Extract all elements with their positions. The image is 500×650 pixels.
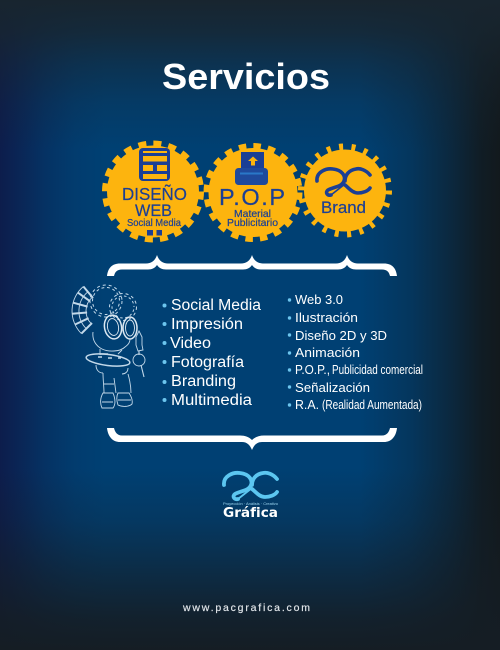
mascot hair <box>72 285 136 334</box>
label: Diseño Web: Social Media <box>127 217 181 229</box>
label: P.O.P <box>219 184 285 229</box>
logo: PAC Gráfica <box>223 473 278 521</box>
service list right: Publicidad comercial <box>332 363 423 377</box>
logo wordmark: Gráfica <box>223 505 278 521</box>
service list right <box>288 293 423 412</box>
bullets right <box>288 298 291 407</box>
label: Diseño Web: DISEÑO <box>122 183 187 204</box>
title: Servicios <box>162 56 330 97</box>
service list left: Social Media <box>171 297 261 314</box>
icon: printer <box>235 152 268 185</box>
label: Brand: Brand <box>321 198 366 217</box>
service list left: Multimedia <box>171 392 252 409</box>
top bracket <box>107 255 397 276</box>
bullets left <box>162 304 166 402</box>
service list right: Ilustración <box>295 311 358 325</box>
service list left: Fotografía <box>171 354 244 371</box>
mascot goggles <box>103 314 137 340</box>
label: P.O.P: P.O.P <box>219 184 285 210</box>
label: P.O.P: Publicitario <box>227 217 278 229</box>
gear: Diseño Web <box>105 144 201 240</box>
service list right: Diseño 2D y 3D <box>295 329 387 343</box>
mascot body, palette and brush <box>85 331 145 408</box>
service list right: R.A. <box>295 398 319 412</box>
service list left: Video <box>170 335 211 352</box>
service list right: Web 3.0 <box>295 293 343 307</box>
website url: www.pacgrafica.com <box>182 602 310 614</box>
icon: social squares <box>147 230 162 236</box>
service list right: P.O.P., <box>295 363 330 377</box>
logo tagline: Proyección · Análisis · Creativo <box>223 502 278 506</box>
logo mark <box>224 473 277 499</box>
gear: PAC Brand <box>302 147 388 234</box>
label: Diseño Web: WEB <box>135 202 172 220</box>
icon: pac logo <box>317 169 370 195</box>
label: Diseño Web <box>122 183 187 229</box>
service list left: Branding <box>171 373 236 390</box>
gear: P.O.P <box>206 146 300 239</box>
label: P.O.P: Material <box>234 208 271 220</box>
service list right: Animación <box>295 346 360 360</box>
icon: web layout <box>139 148 170 181</box>
service list right: Señalización <box>295 381 370 395</box>
mascot illustration <box>72 285 145 408</box>
service list left: Impresión <box>171 316 243 333</box>
bottom bracket <box>107 428 397 450</box>
service list right: (Realidad Aumentada) <box>322 398 422 412</box>
service list left <box>162 297 261 409</box>
